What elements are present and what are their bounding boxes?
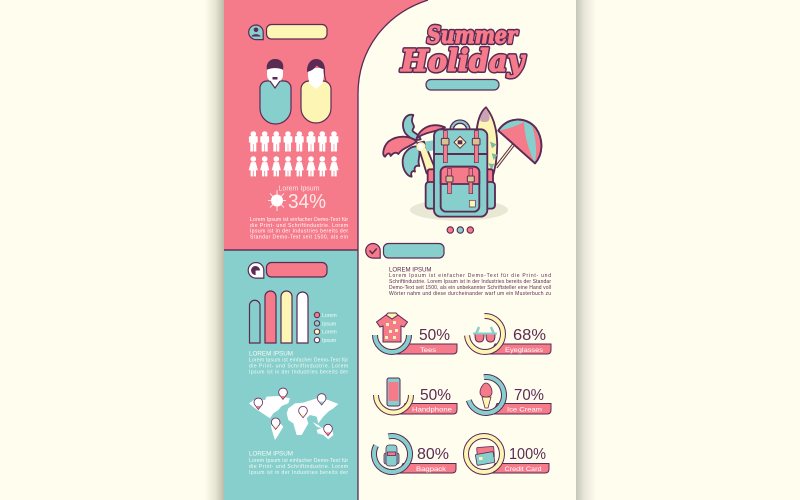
subtitle pill xyxy=(426,80,499,90)
title xyxy=(400,22,526,79)
legend: Ipsum xyxy=(322,321,336,327)
icon: backpack xyxy=(426,122,495,217)
heading badge: people xyxy=(249,24,327,40)
legend: Lorem xyxy=(322,313,337,319)
text block: people description: Ipsum ist in der Industries bereits der xyxy=(250,229,348,235)
title: Summer xyxy=(427,22,519,49)
text block: chart description: die Print- und Schriftindustrie. Lorem xyxy=(249,364,348,370)
icon: surfboard xyxy=(476,107,498,180)
text block: people description xyxy=(250,217,348,240)
value: 50% xyxy=(420,387,451,404)
text block: people description: die Print- und Schriftindustrie. Lorem xyxy=(250,223,348,229)
icon: palm tree xyxy=(383,115,445,177)
icon: woman avatar xyxy=(301,59,331,123)
name: Bagpack xyxy=(416,466,447,473)
title: Holiday xyxy=(400,44,526,79)
name: Credit Card xyxy=(504,466,542,473)
panel: chart and map xyxy=(224,250,358,500)
heading badge: chart xyxy=(248,262,327,278)
value: 50% xyxy=(419,327,450,344)
text block: main description: Demo-Text seit 1500, als ein unbekannter Schriftsteller eine Hand voll xyxy=(389,285,551,291)
pictogram: male figures row xyxy=(249,131,338,152)
legend: Ipsum xyxy=(322,338,336,344)
ring xyxy=(467,316,503,352)
title: Summer xyxy=(427,22,519,49)
ribbon xyxy=(484,464,549,473)
name: Eyeglasses xyxy=(505,347,544,354)
icon: umbrella xyxy=(496,120,541,167)
text block: chart description: Ipsum ist in der Industries bereits der xyxy=(249,370,348,376)
ring xyxy=(466,436,502,472)
text block: chart description xyxy=(249,350,348,376)
text block: map description: Lorem Ipsum ist einfacher Demo-Text für xyxy=(249,458,348,464)
text block: map description: LOREM IPSUM xyxy=(249,450,293,458)
stat: eyeglasses 68 percent xyxy=(467,316,551,354)
pictogram: female figures row xyxy=(249,156,339,176)
text block: main description xyxy=(389,266,551,297)
text block: chart description: LOREM IPSUM xyxy=(249,350,293,358)
name: Tees xyxy=(420,347,437,354)
text block: map description xyxy=(249,450,348,476)
heading badge: checklist xyxy=(366,244,444,258)
stat: tees 50 percent xyxy=(375,313,457,354)
illustration: backpack with palm, surfboard and umbrella xyxy=(383,107,541,221)
ring xyxy=(376,395,411,412)
ribbon xyxy=(392,464,456,473)
world map with pins xyxy=(249,388,338,440)
icon: man avatar xyxy=(260,59,291,124)
stat: 34 percent: 34% xyxy=(288,191,326,213)
text block: main description: Lorem Ipsum ist einfacher Demo-Text für die Print- und xyxy=(389,273,551,279)
value: 80% xyxy=(417,446,449,463)
ring xyxy=(375,335,409,352)
text block: people description: Lorem Ipsum ist einfacher Demo-Text für xyxy=(250,217,348,223)
stat: bagpack 80 percent xyxy=(371,433,456,475)
icon: credit cards xyxy=(475,446,495,465)
title: Holiday xyxy=(400,44,526,79)
ribbon xyxy=(393,404,457,414)
text block: main description: LOREM IPSUM xyxy=(389,266,432,274)
ribbon xyxy=(485,344,551,354)
name: Handphone xyxy=(412,406,452,414)
icon: sunglasses xyxy=(473,327,497,342)
icon: shirt xyxy=(376,313,408,342)
icon: ice cream xyxy=(480,383,492,408)
ring xyxy=(371,433,413,475)
icon: phone xyxy=(387,378,400,406)
icon: sun xyxy=(268,190,286,211)
ribbon xyxy=(486,404,551,414)
panel: poster background xyxy=(224,0,576,500)
value: 100% xyxy=(509,446,546,463)
text block: map description: Ipsum ist in der Industries bereits der xyxy=(249,470,348,476)
text block: main description: Schriftindustrie. Lorem Ipsum ist in der Industries bereits der Standar xyxy=(389,279,551,285)
icon: small backpack xyxy=(384,445,399,466)
text block: map description: die Print- und Schriftindustrie. Lorem xyxy=(249,464,348,470)
pagination dots xyxy=(447,227,473,233)
ground shadow xyxy=(410,199,508,221)
stat: handphone 50 percent xyxy=(376,378,457,414)
panel: cream content area xyxy=(358,0,576,500)
value: 68% xyxy=(513,327,546,344)
text block: chart description: Lorem Ipsum ist einfacher Demo-Text für xyxy=(249,358,348,364)
ribbon xyxy=(392,344,457,354)
text block: main description: Wörter nahm und diese durcheinander warf um ein Musterbuch zu xyxy=(389,291,551,297)
text block: people description: Standar Demo-Text seit 1500, als ein xyxy=(250,234,348,240)
legend: Lorem xyxy=(322,330,337,336)
legend xyxy=(314,312,337,344)
panel: people statistics xyxy=(224,0,428,250)
bar chart xyxy=(250,291,308,343)
stat: credit card 100 percent xyxy=(466,436,549,473)
stat: ice cream 70 percent xyxy=(466,375,551,415)
value: 70% xyxy=(514,387,544,404)
name: Ice Cream xyxy=(507,406,542,414)
ring xyxy=(466,375,506,415)
label: lorem ipsum: Lorem Ipsum xyxy=(278,186,320,192)
